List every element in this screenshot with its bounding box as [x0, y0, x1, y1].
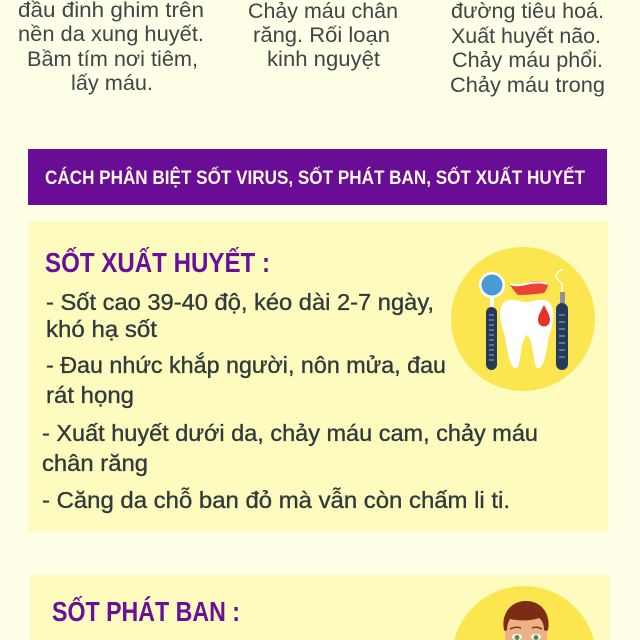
text block: dengue symptoms: - Sốt cao 39-40 độ, kéo dài 2-7 ngày,	[46, 289, 434, 315]
panel: rash fever	[30, 575, 610, 640]
heading: dengue fever: SỐT XUẤT HUYẾT :	[45, 246, 270, 278]
text block: dengue symptoms: - Căng da chỗ ban đỏ mà vẫn còn chấm li ti.	[42, 487, 510, 513]
banner: section heading	[28, 149, 607, 205]
text column: left symptoms: lấy máu.	[71, 72, 153, 95]
text column: right symptoms: Xuất huyết não.	[451, 25, 601, 48]
text column: middle symptoms: kinh nguyệt	[267, 48, 380, 71]
text column: middle symptoms: răng. Rối loạn	[253, 24, 390, 47]
text column: right symptoms: Chảy máu phổi.	[452, 49, 603, 72]
text column: middle symptoms	[248, 0, 398, 71]
panel: dengue fever	[28, 221, 608, 532]
text column: right symptoms: đường tiêu hoá.	[451, 0, 604, 23]
text column: left symptoms: nền da xung huyết.	[18, 23, 204, 46]
text column: left symptoms	[18, 0, 204, 95]
icon: person's face	[454, 586, 594, 640]
text block: dengue symptoms	[42, 289, 538, 513]
text column: right symptoms: Chảy máu trong	[450, 74, 605, 97]
text block: dengue symptoms: khó hạ sốt	[46, 316, 158, 342]
text block: dengue symptoms: chân răng	[42, 450, 148, 476]
text column: right symptoms	[450, 0, 605, 97]
heading: rash fever: SỐT PHÁT BAN :	[52, 595, 240, 627]
text column: middle symptoms: Chảy máu chân	[248, 0, 398, 23]
banner: section heading: CÁCH PHÂN BIỆT SỐT VIRUS, SỐT PHÁT BAN, SỐT XUẤT HUYẾT	[45, 167, 585, 189]
text block: dengue symptoms: rát họng	[46, 382, 134, 408]
text block: dengue symptoms: - Xuất huyết dưới da, chảy máu cam, chảy máu	[42, 420, 538, 446]
text column: left symptoms: Bầm tím nơi tiêm,	[27, 48, 198, 71]
text block: dengue symptoms: - Đau nhức khắp người, nôn mửa, đau	[46, 352, 446, 378]
icon: tooth with dental tools	[451, 247, 595, 391]
